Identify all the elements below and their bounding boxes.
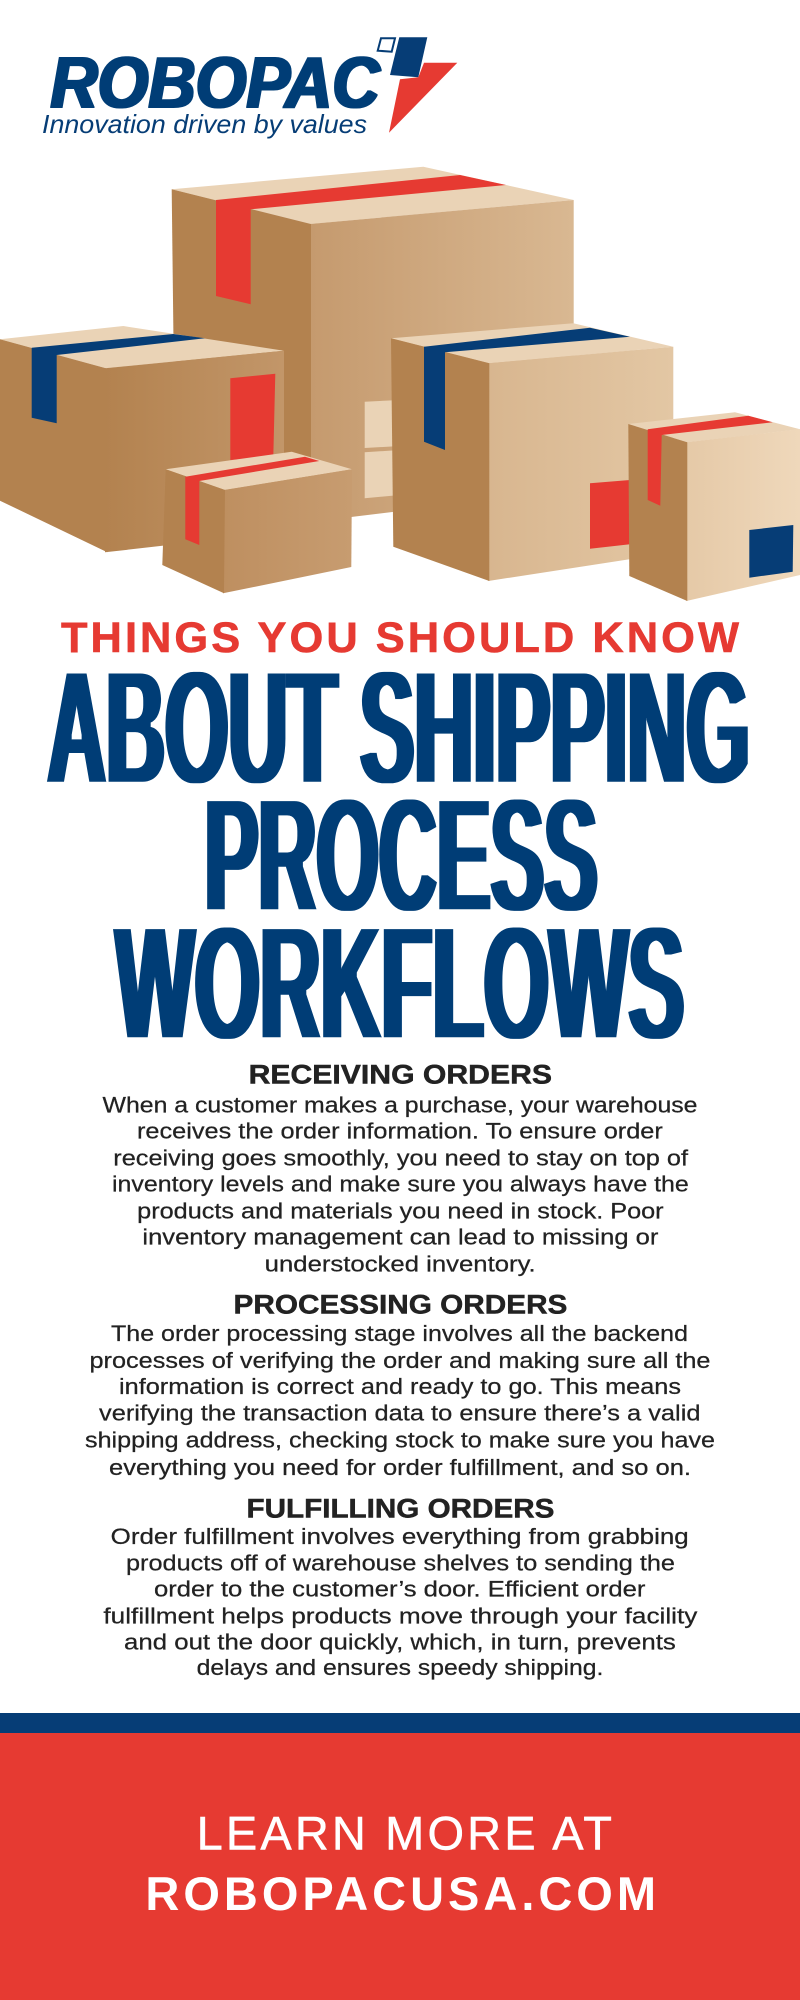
small right box (628, 412, 800, 601)
logo wordmark: ROBOPAC (50, 44, 380, 124)
body: fulfilling orders (103, 1524, 697, 1680)
body: processing orders: information is correct and ready to go. This means (119, 1374, 681, 1399)
small middle box (162, 452, 352, 593)
footer line 2: website: ROBOPACUSA.COM (145, 1867, 656, 1920)
heading: receiving orders: RECEIVING ORDERS (249, 1060, 552, 1090)
body: receiving orders: inventory management can lead to missing or (142, 1225, 658, 1250)
heading: fulfilling orders: FULFILLING ORDERS (246, 1494, 554, 1524)
body: fulfilling orders: Order fulfillment involves everything from grabbing (111, 1524, 689, 1549)
body: receiving orders: When a customer makes a purchase, your warehouse (102, 1093, 698, 1118)
logo mark: red bolt (389, 63, 457, 133)
logo tagline: Innovation driven by values (42, 109, 367, 139)
body: processing orders: shipping address, checking stock to make sure you have (85, 1428, 715, 1453)
section: processing orders (85, 1289, 715, 1480)
body: processing orders: The order processing stage involves all the backend (111, 1321, 688, 1346)
body: receiving orders: products and materials you need in stock. Poor (137, 1198, 664, 1223)
body: processing orders (85, 1321, 715, 1480)
logo: Robopac (42, 37, 457, 139)
heading: processing orders: PROCESSING ORDERS (234, 1289, 567, 1319)
body: processing orders: processes of verifying the order and making sure all the (90, 1348, 710, 1373)
body: fulfilling orders: order to the customer’s door. Efficient order (154, 1577, 645, 1602)
body: receiving orders: receives the order information. To ensure order (137, 1119, 663, 1144)
section: fulfilling orders (103, 1494, 697, 1680)
body: receiving orders: inventory levels and make sure you always have the (112, 1172, 689, 1197)
main title (47, 636, 750, 1074)
body: receiving orders: receiving goes smoothly, you need to stay on top of (113, 1146, 689, 1171)
body: processing orders: everything you need for order fulfillment, and so on. (109, 1455, 691, 1480)
footer panel (0, 1733, 800, 2000)
large back box (172, 167, 574, 522)
body: fulfilling orders: products off of warehouse shelves to sending the (126, 1551, 675, 1576)
subtitle: THINGS YOU SHOULD KNOW (61, 614, 742, 662)
body: processing orders: verifying the transaction data to ensure there’s a valid (99, 1401, 700, 1426)
footer line 1: LEARN MORE AT (197, 1806, 612, 1859)
body: fulfilling orders: delays and ensures speedy shipping. (197, 1655, 603, 1680)
logo mark: outlined square (378, 38, 395, 52)
blue divider band (0, 1713, 800, 1733)
section: receiving orders (102, 1060, 698, 1277)
left box (0, 326, 284, 552)
right box (391, 323, 673, 581)
illustration: stacked cardboard boxes (0, 167, 800, 601)
logo mark: blue square (390, 37, 427, 77)
body: receiving orders: understocked inventory. (265, 1252, 536, 1277)
footer background (0, 1733, 800, 2000)
body: fulfilling orders: and out the door quickly, which, in turn, prevents (124, 1629, 676, 1654)
body: receiving orders (102, 1093, 698, 1277)
body: fulfilling orders: fulfillment helps products move through your facility (103, 1603, 697, 1628)
